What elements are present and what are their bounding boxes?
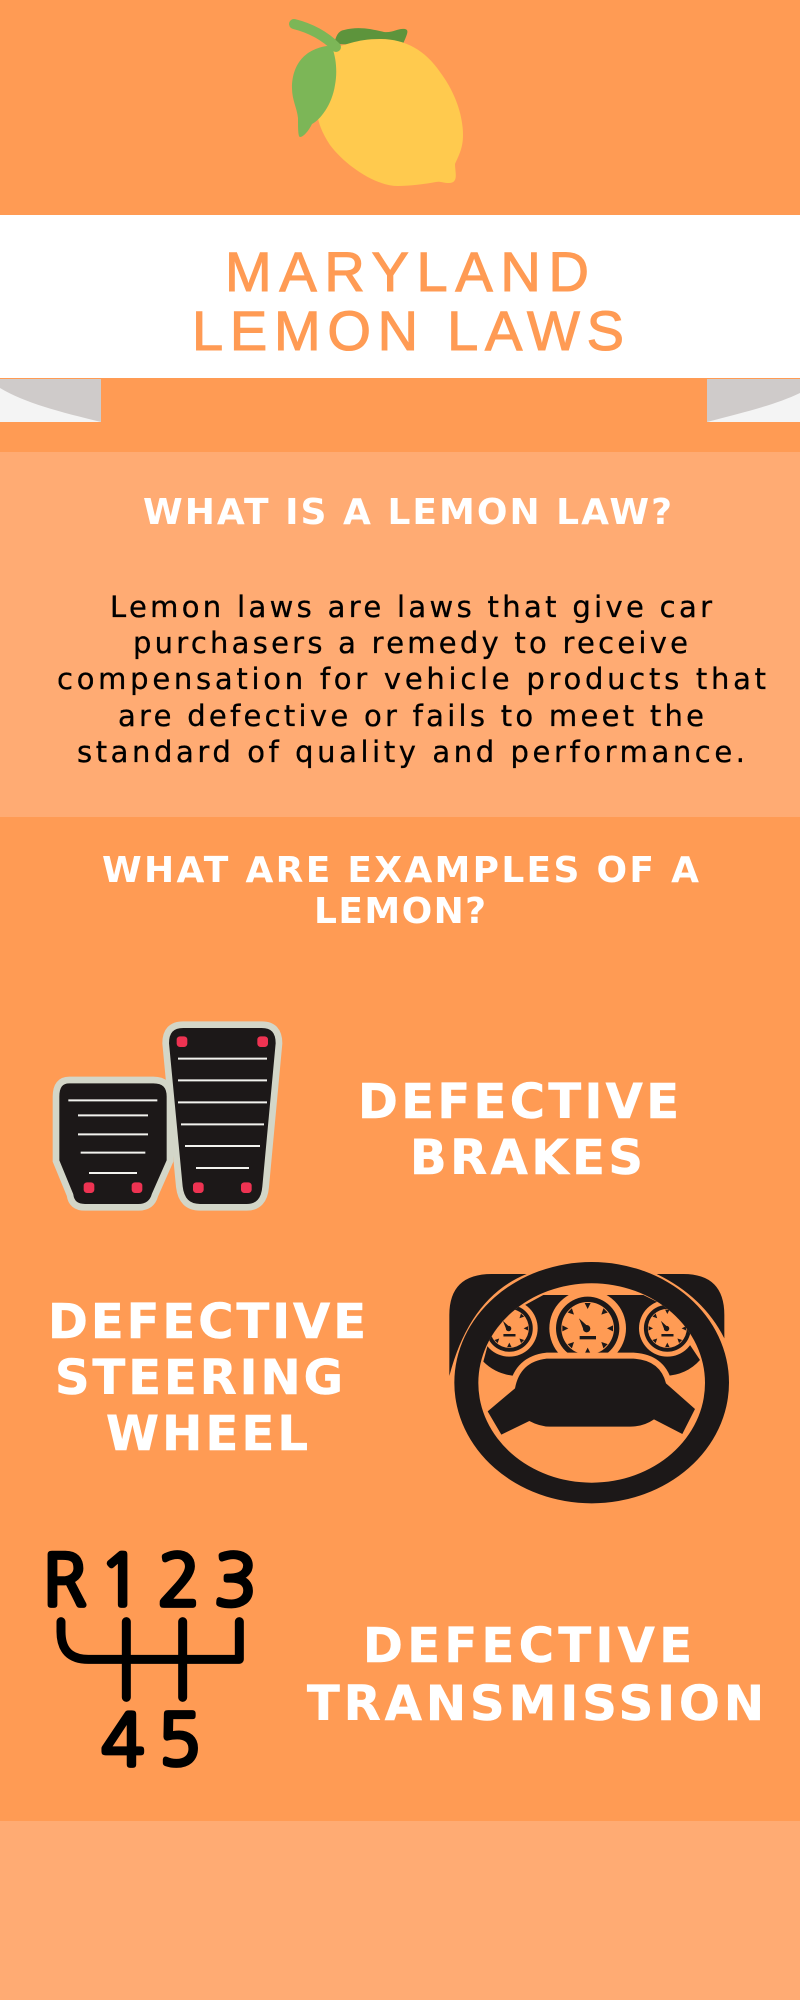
icon: gear shift pattern: 5: [158, 1706, 201, 1776]
label: defective brakes: [358, 1074, 679, 1186]
label: defective brakes: BRAKES: [410, 1130, 643, 1186]
label: defective steering wheel: STEERING: [55, 1350, 343, 1406]
heading: what is a lemon law: WHAT IS A LEMON LAW?: [143, 492, 672, 533]
label: defective transmission: TRANSMISSION: [307, 1676, 764, 1732]
definition paragraph: compensation for vehicle products that: [57, 662, 766, 696]
label: defective transmission: [307, 1618, 764, 1732]
definition paragraph: are defective or fails to meet the: [118, 699, 704, 733]
label: defective transmission: DEFECTIVE: [363, 1618, 692, 1674]
icon: gear shift pattern: [43, 1546, 257, 1776]
heading: what are examples of a lemon: WHAT ARE EXAMPLES OF A: [102, 850, 699, 891]
definition paragraph: [57, 590, 766, 769]
definition paragraph: purchasers a remedy to receive: [133, 626, 688, 660]
label: defective steering wheel: DEFECTIVE: [48, 1294, 366, 1350]
icon: gear shift pattern: R: [43, 1546, 87, 1616]
heading: what are examples of a lemon: LEMON?: [314, 891, 486, 932]
ribbon fold right: [707, 379, 800, 422]
label: defective steering wheel: WHEEL: [106, 1406, 308, 1462]
icon: gear shift pattern: 3: [214, 1546, 257, 1616]
heading: what are examples of a lemon: [102, 850, 699, 932]
icon: brake pedals: [56, 1025, 279, 1207]
ribbon fold left: [0, 379, 101, 422]
definition paragraph: standard of quality and performance.: [77, 735, 745, 769]
title: Maryland Lemon Laws: [192, 240, 624, 362]
lemon icon: [292, 24, 463, 186]
label: defective brakes: DEFECTIVE: [358, 1074, 679, 1130]
icon: gear shift pattern: 1: [99, 1546, 142, 1616]
title: Maryland Lemon Laws: LEMON LAWS: [192, 299, 624, 362]
footer band: [0, 1821, 800, 2000]
title banner: [0, 215, 800, 378]
panel: what is a lemon law: [0, 452, 800, 817]
icon: gear shift pattern: 2: [158, 1546, 200, 1616]
definition paragraph: Lemon laws are laws that give car: [110, 590, 712, 624]
title: Maryland Lemon Laws: MARYLAND: [225, 240, 589, 303]
label: defective steering wheel: [48, 1294, 366, 1462]
icon: steering wheel and dashboard: [449, 1262, 729, 1503]
icon: gear shift pattern: 4: [101, 1706, 144, 1776]
